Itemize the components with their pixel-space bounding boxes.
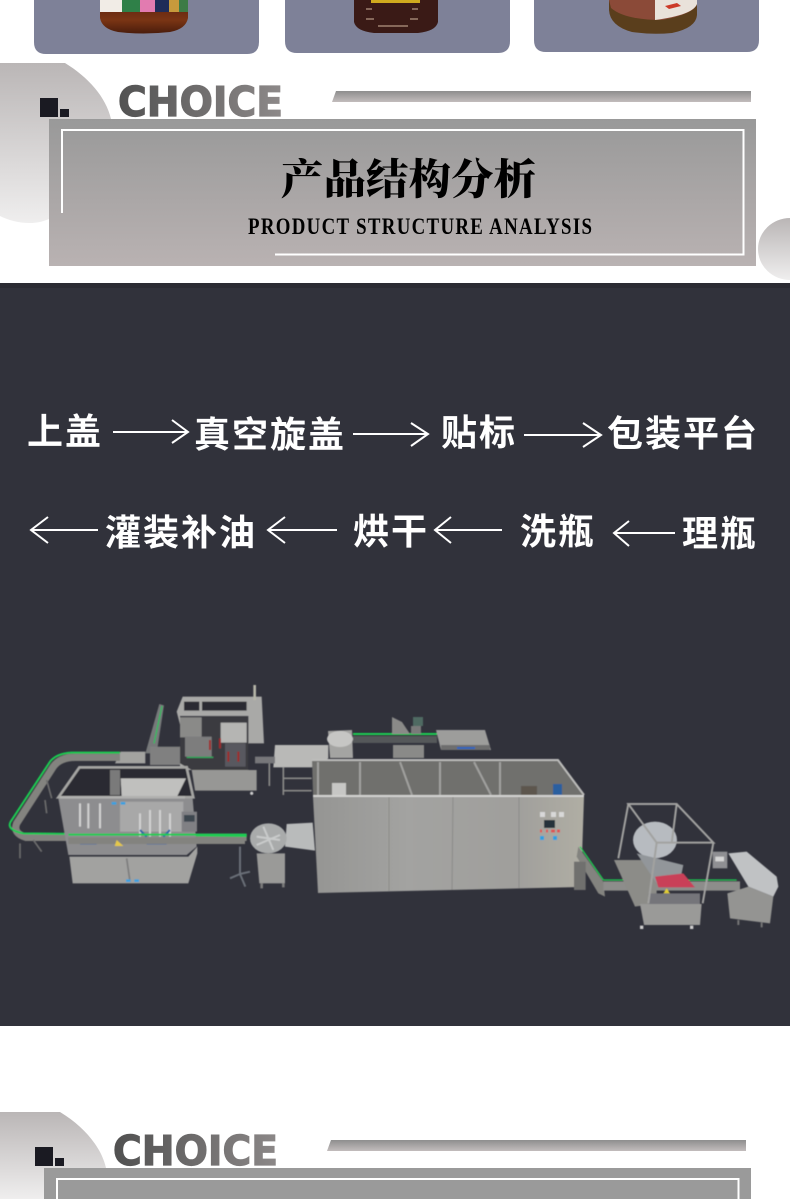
step: 贴标: 贴标	[441, 412, 517, 453]
conveyor loop	[10, 753, 247, 858]
icon: jar 3	[609, 0, 697, 34]
title panel	[44, 1168, 751, 1199]
step: 洗瓶: 洗瓶	[520, 511, 596, 552]
step: 灌装补油: 灌装补油	[105, 512, 257, 553]
decorative circle left	[0, 63, 111, 223]
production line machinery	[10, 685, 778, 927]
top right gradient bar	[327, 1140, 746, 1151]
step: 烘干: 烘干	[353, 511, 429, 552]
arrow 4	[31, 517, 98, 543]
CHOICE label: CHOICE	[113, 1127, 278, 1175]
decorative circle right	[758, 218, 790, 280]
arrow 2	[353, 423, 428, 446]
process row 1	[27, 411, 759, 455]
bottle feed table	[727, 852, 778, 927]
arrow 3	[524, 423, 601, 447]
right machines	[574, 804, 778, 927]
title: 产品结构分析	[281, 157, 536, 204]
step: 真空旋盖: 真空旋盖	[194, 414, 346, 455]
labeller head	[392, 717, 424, 758]
upper labelling machine	[327, 717, 491, 758]
panel: dark process section	[0, 283, 790, 1026]
panel: product card 1	[34, 0, 259, 54]
left machines	[10, 685, 328, 888]
bottle sorting machine	[614, 804, 727, 927]
icon: jar 1	[100, 0, 188, 34]
control panel	[540, 812, 564, 838]
section heading 1	[0, 63, 790, 280]
drying tunnel	[312, 760, 584, 893]
bottle turntable	[328, 730, 353, 758]
title panel	[49, 119, 756, 266]
top right gradient bar	[332, 91, 751, 102]
filling machine	[58, 767, 247, 883]
step: 上盖: 上盖	[27, 411, 103, 452]
bottle stand	[230, 847, 250, 887]
arrow 1	[113, 420, 188, 443]
decorative circle left	[0, 1112, 106, 1199]
bottle washing conveyor	[574, 847, 740, 897]
arrow 7	[614, 521, 675, 546]
step: 理瓶: 理瓶	[682, 513, 758, 554]
discharge tray	[436, 730, 491, 750]
process row 2	[31, 511, 758, 554]
CHOICE label: CHOICE	[118, 78, 283, 126]
bottle sorting turntable	[250, 823, 315, 888]
subtitle: PRODUCT STRUCTURE ANALYSIS	[248, 213, 592, 239]
panel: product card 3	[534, 0, 759, 52]
step: 包装平台: 包装平台	[607, 413, 759, 454]
arrow 5	[268, 517, 337, 543]
capping machine	[177, 685, 264, 795]
arrow 6	[435, 517, 502, 543]
bottle discharge table	[255, 745, 328, 795]
panel: product card 2	[285, 0, 510, 53]
icon: squares	[35, 1147, 64, 1166]
section heading 2	[0, 1112, 751, 1199]
icon: squares	[40, 98, 69, 117]
labeller conveyor	[353, 736, 437, 743]
bottle lift chute	[115, 704, 180, 765]
icon: jar 2	[354, 0, 438, 33]
